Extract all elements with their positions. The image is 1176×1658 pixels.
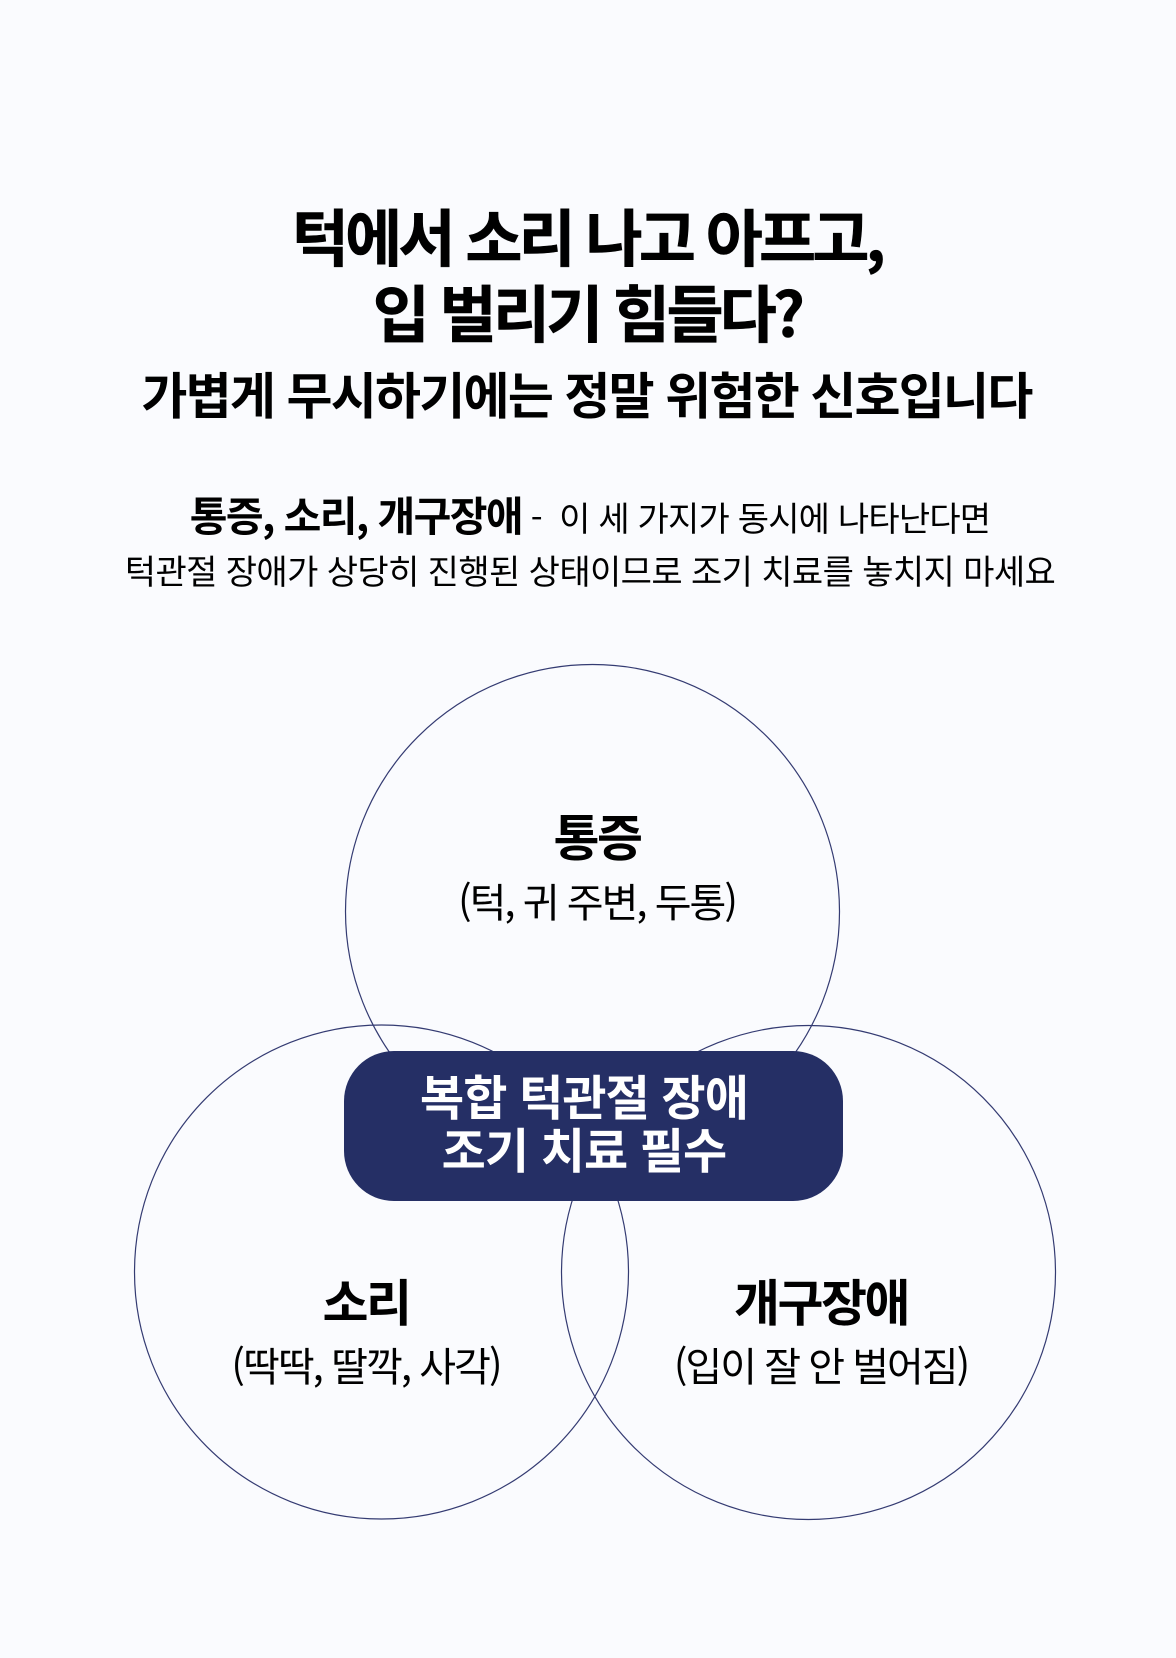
circle: pain	[346, 664, 840, 1158]
description text	[125, 483, 1055, 594]
label: sound: 소리	[322, 1264, 410, 1336]
label: sound: (딱딱, 딸깍, 사각)	[231, 1335, 501, 1393]
description text: 턱관절 장애가 상당히 진행된 상태이므로 조기 치료를 놓치지 마세요	[125, 545, 1055, 594]
label: pain: (턱, 귀 주변, 두통)	[458, 871, 736, 929]
center callout text: 복합 턱관절 장애	[420, 1059, 748, 1129]
description text: 통증, 소리, 개구장애 - 이 세 가지가 동시에 나타난다면	[190, 483, 990, 543]
subtitle: 가볍게 무시하기에는 정말 위험한 신호입니다	[141, 357, 1032, 429]
circle: jaw limitation	[562, 1026, 1056, 1520]
label: pain: 통증	[554, 799, 640, 871]
label: jaw limitation	[674, 1264, 968, 1393]
circle: sound	[134, 1025, 628, 1519]
title	[292, 189, 883, 355]
label: pain	[458, 799, 736, 929]
label: jaw limitation: 개구장애	[734, 1264, 908, 1336]
label: sound	[231, 1264, 501, 1393]
center callout pill	[344, 1051, 843, 1201]
title: 입 벌리기 힘들다?	[373, 265, 801, 355]
center callout text: 조기 치료 필수	[442, 1112, 726, 1182]
label: jaw limitation: (입이 잘 안 벌어짐)	[674, 1335, 968, 1393]
title: 턱에서 소리 나고 아프고,	[292, 189, 882, 279]
center callout text	[420, 1059, 748, 1182]
